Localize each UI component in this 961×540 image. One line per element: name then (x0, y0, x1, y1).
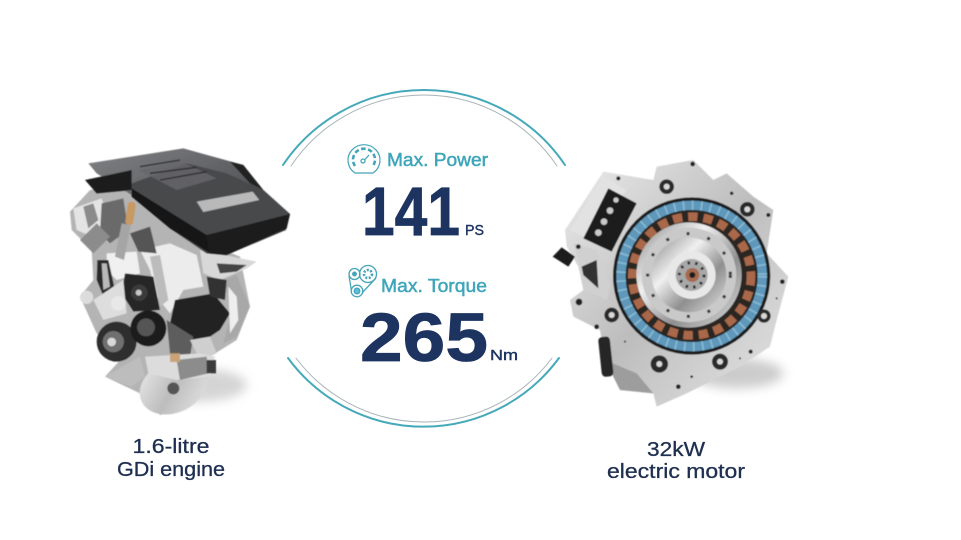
motor parts (553, 160, 788, 407)
value: 265 Nm: 265 (360, 299, 488, 376)
label: engine: 1.6-litre (132, 436, 210, 458)
engine illustration (70, 148, 290, 425)
icon: torque belt pulleys (349, 266, 376, 297)
connector (553, 247, 575, 267)
engine shadow (147, 368, 247, 402)
label: motor: electric motor (607, 461, 745, 483)
second pulley (130, 310, 166, 346)
stator (626, 211, 757, 341)
value: 265 Nm: Nm (490, 347, 518, 364)
heading: max power: Max. Power (387, 149, 488, 170)
heading: max torque: Max. Torque (381, 275, 487, 296)
crank pulley (97, 322, 137, 362)
housing plate (565, 160, 788, 407)
plate holes (576, 162, 785, 389)
label: motor (607, 439, 745, 483)
top arc (283, 90, 565, 166)
black ring (613, 197, 770, 355)
controller board (583, 188, 637, 252)
bolt bosses (604, 179, 771, 373)
icon: speedometer (348, 145, 380, 173)
rotor disc (636, 222, 742, 328)
label: engine: GDi engine (117, 459, 225, 481)
motor illustration (553, 160, 788, 407)
alternator (105, 357, 145, 387)
hub bolts (679, 263, 704, 287)
motor shadow (690, 358, 783, 388)
blue winding ring (621, 205, 762, 347)
engine parts (70, 183, 257, 425)
label: engine (117, 436, 225, 481)
bottom arc (288, 358, 559, 427)
engine cover (85, 148, 290, 255)
value: 141 PS: 141 (362, 173, 460, 250)
centre (685, 268, 699, 282)
label: motor: 32kW (647, 439, 705, 461)
value: 141 PS: PS (465, 222, 484, 239)
copper coils (632, 217, 751, 335)
